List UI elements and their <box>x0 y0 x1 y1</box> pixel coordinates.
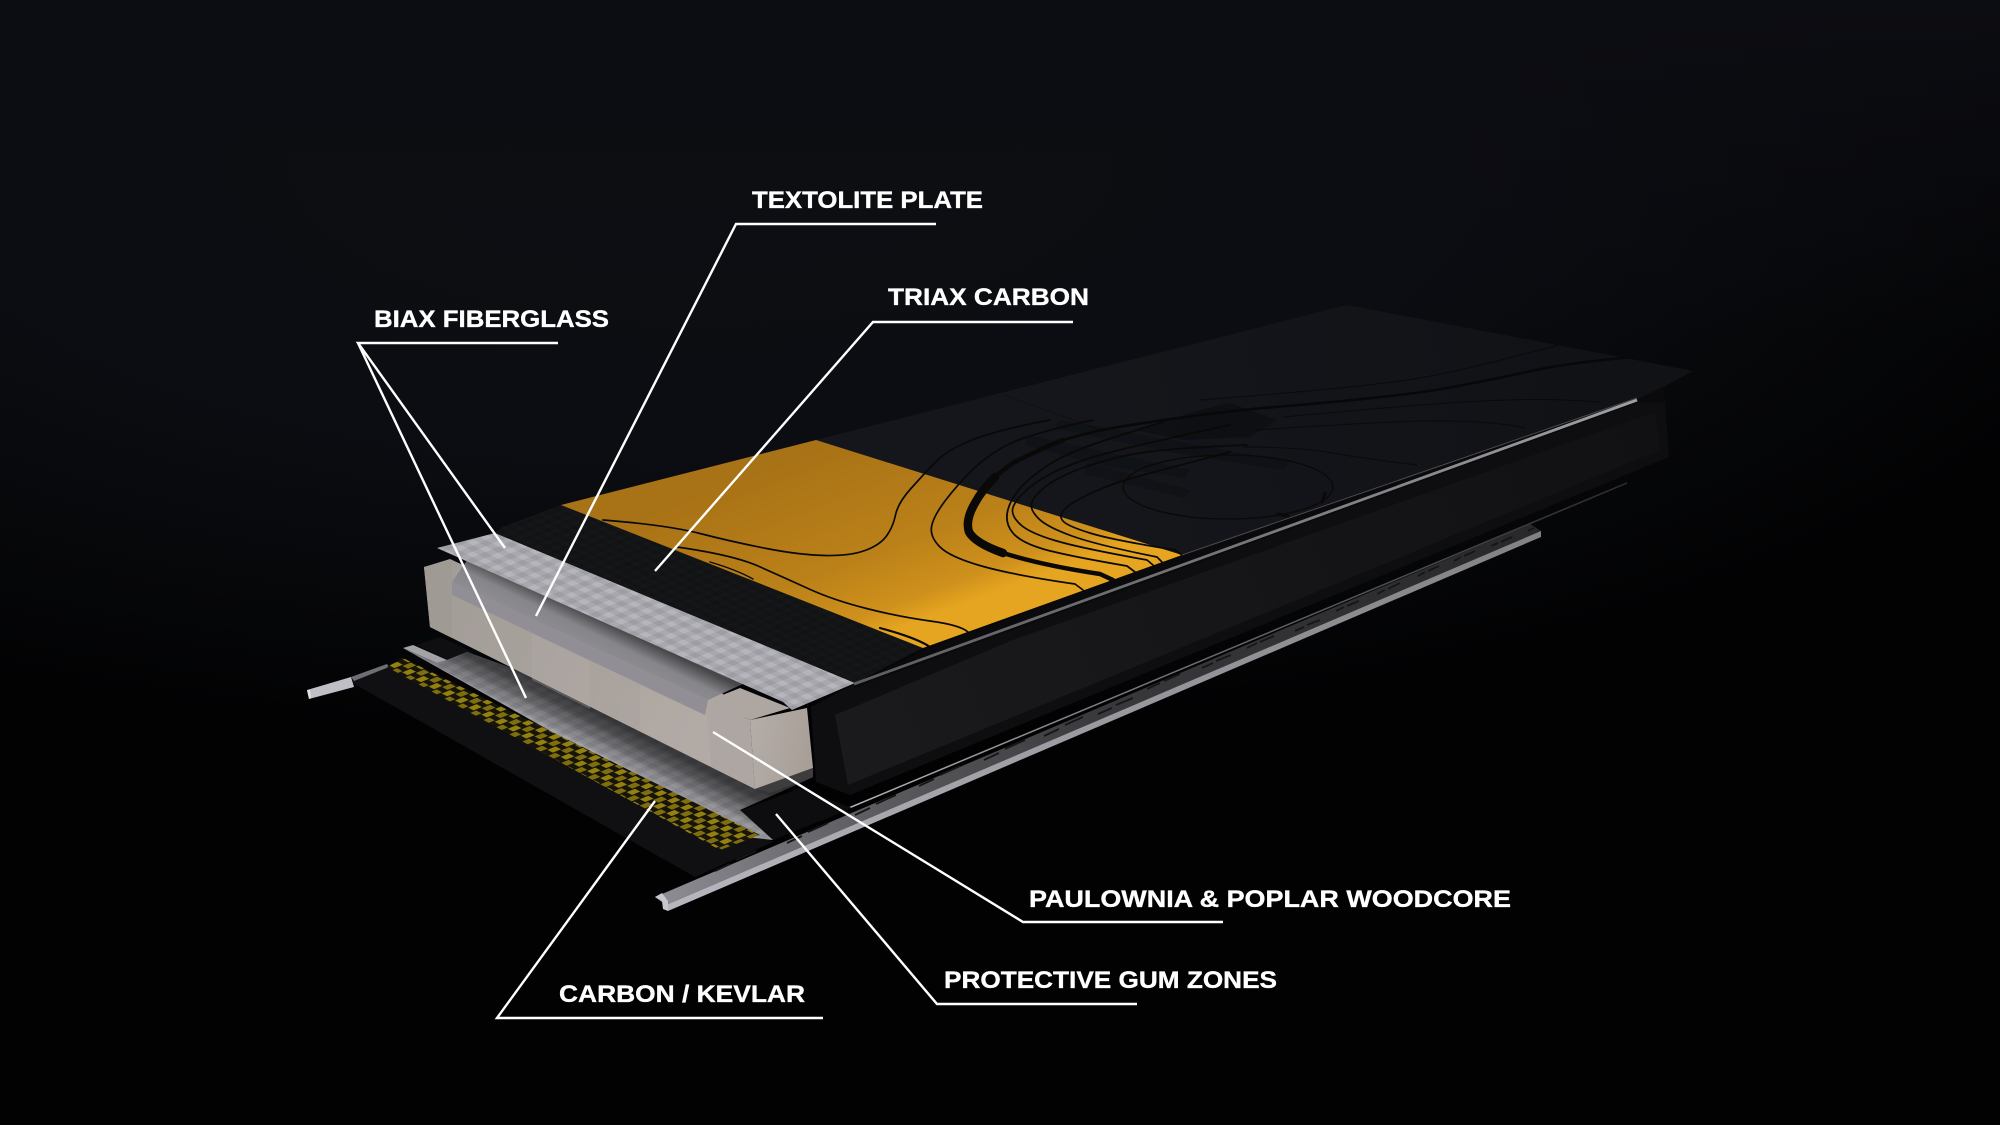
left rail stub <box>307 664 389 699</box>
thin silver edge line <box>820 483 1627 820</box>
callout: triax carbon: TRIAX CARBON <box>888 284 1089 311</box>
callout: textolite plate <box>536 187 983 616</box>
textolite plate <box>452 556 745 715</box>
carbon kevlar strip <box>387 658 760 850</box>
steel edge rail with T-slots <box>655 524 1541 911</box>
callout: paulownia and poplar woodcore: PAULOWNIA & POPLAR WOODCORE <box>1029 886 1511 913</box>
protective gum zone <box>740 788 852 840</box>
triax carbon layer <box>495 505 923 683</box>
side wall, right body <box>811 398 1669 795</box>
callout: triax carbon <box>655 284 1089 571</box>
bottom black base sheet <box>351 665 773 877</box>
callout: biax fiberglass: BIAX FIBERGLASS <box>374 306 609 333</box>
board illustration <box>307 305 1693 911</box>
callout: biax fiberglass <box>358 306 609 698</box>
lower biax fiberglass <box>403 648 813 840</box>
triax yellow carbon sheet <box>561 440 1182 648</box>
top sheet edge highlight <box>854 398 1637 684</box>
paulownia and poplar wood core <box>424 559 813 793</box>
logo smudge on top sheet <box>1025 403 1290 498</box>
callout: carbon kevlar <box>497 801 823 1018</box>
top sheet underside lip <box>854 387 1666 688</box>
callout: protective gum zones: PROTECTIVE GUM ZONES <box>944 967 1277 994</box>
callout: paulownia and poplar woodcore <box>713 732 1511 922</box>
top sheet with contour graphic <box>816 305 1693 555</box>
contour lines <box>603 345 1633 647</box>
upper biax fiberglass <box>437 533 855 710</box>
callout: carbon kevlar: CARBON / KEVLAR <box>559 981 805 1008</box>
callout: protective gum zones <box>776 814 1277 1004</box>
small gum strip, tail end <box>403 637 473 663</box>
callout: textolite plate: TEXTOLITE PLATE <box>752 187 983 214</box>
